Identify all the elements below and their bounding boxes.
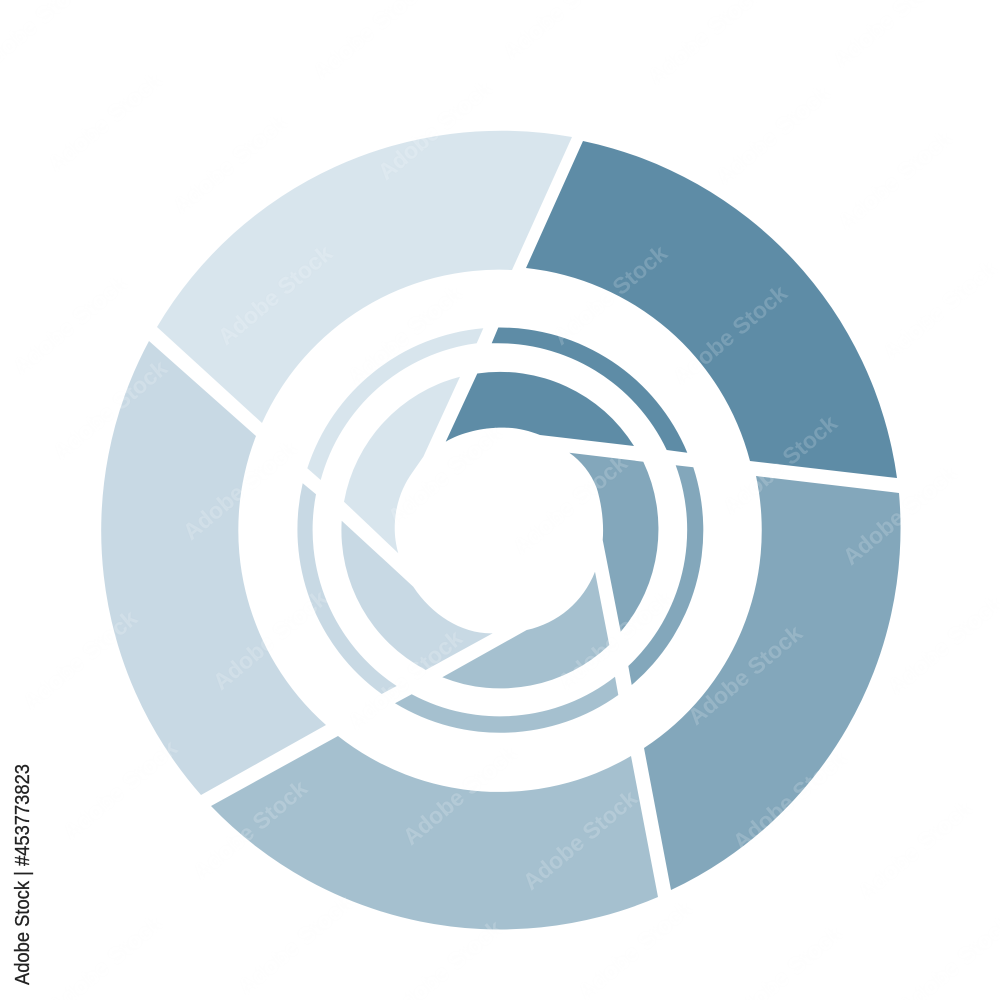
segment 5: lightest blue: [157, 131, 572, 553]
watermark pattern: Adobe Stock: [343, 625, 467, 735]
watermark pattern: Adobe Stock: [718, 410, 842, 520]
inner blade: medium blue: [569, 453, 658, 632]
outer ring blade: medium blue: [644, 476, 901, 890]
outer ring blade: lightest blue: [157, 131, 572, 423]
watermark pattern: Adobe Stock: [548, 240, 672, 350]
segment 3: steel blue: [211, 572, 658, 930]
inner blade: steel blue: [442, 572, 609, 688]
watermark pattern: Adobe Stock: [8, 270, 132, 380]
middle ring arc: medium blue: [628, 465, 703, 685]
middle ring arc: steel blue: [395, 677, 618, 733]
watermark pattern: Adobe Stock: [373, 75, 497, 185]
watermark pattern: Adobe Stock: [178, 435, 302, 545]
inner blade: dark blue: [446, 372, 634, 446]
middle ring arc: dark blue: [492, 327, 687, 453]
watermark pattern: Adobe Stock: [168, 109, 292, 219]
watermark pattern: Adobe Stock: [878, 255, 1000, 365]
watermark pattern: Adobe Stock: [711, 80, 835, 190]
middle ring arc: lightest blue: [307, 328, 483, 480]
watermark pattern: Adobe Stock: [343, 280, 467, 390]
watermark pattern: Adobe Stock: [188, 775, 312, 885]
watermark pattern: Adobe Stock: [383, 420, 507, 530]
watermark pattern: Adobe Stock: [518, 785, 642, 895]
middle ring arc: pale blue: [297, 483, 397, 694]
watermark pattern: Adobe Stock: [48, 355, 172, 465]
segment 2: medium blue: [569, 453, 901, 890]
watermark pattern: Adobe Stock: [58, 735, 182, 845]
watermark pattern: Adobe Stock: [233, 890, 357, 1000]
stock credit text: Adobe Stock | #453773823: [12, 764, 34, 985]
watermark pattern: Adobe Stock: [398, 740, 522, 850]
watermark pattern: Adobe Stock: [838, 460, 962, 570]
watermark pattern: Adobe Stock: [728, 745, 852, 855]
inner blade: lightest blue: [344, 377, 460, 553]
watermark pattern: Adobe Stock: [553, 585, 677, 695]
segment 4: pale blue: [101, 341, 493, 795]
watermark pattern: Adobe Stock: [508, 450, 632, 560]
watermark pattern: Adobe Stock: [18, 605, 142, 715]
outer ring blade: steel blue: [211, 736, 658, 930]
segment 1: dark blue: [446, 141, 897, 478]
watermark pattern: Adobe Stock: [833, 125, 957, 235]
watermark pattern: Adobe Stock: [43, 67, 167, 177]
watermark pattern: Adobe Stock: [683, 620, 807, 730]
watermark pattern: Adobe Stock: [213, 240, 337, 350]
inner blade: pale blue: [341, 521, 493, 670]
outer ring blade: dark blue: [526, 141, 897, 478]
diagram: aperture shaped concentric rings: [101, 131, 901, 930]
watermark pattern: Adobe Stock: [668, 280, 792, 390]
outer ring blade: pale blue: [101, 341, 326, 795]
watermark pattern: Adobe Stock: [208, 585, 332, 695]
watermark pattern: Adobe Stock: [853, 795, 977, 905]
